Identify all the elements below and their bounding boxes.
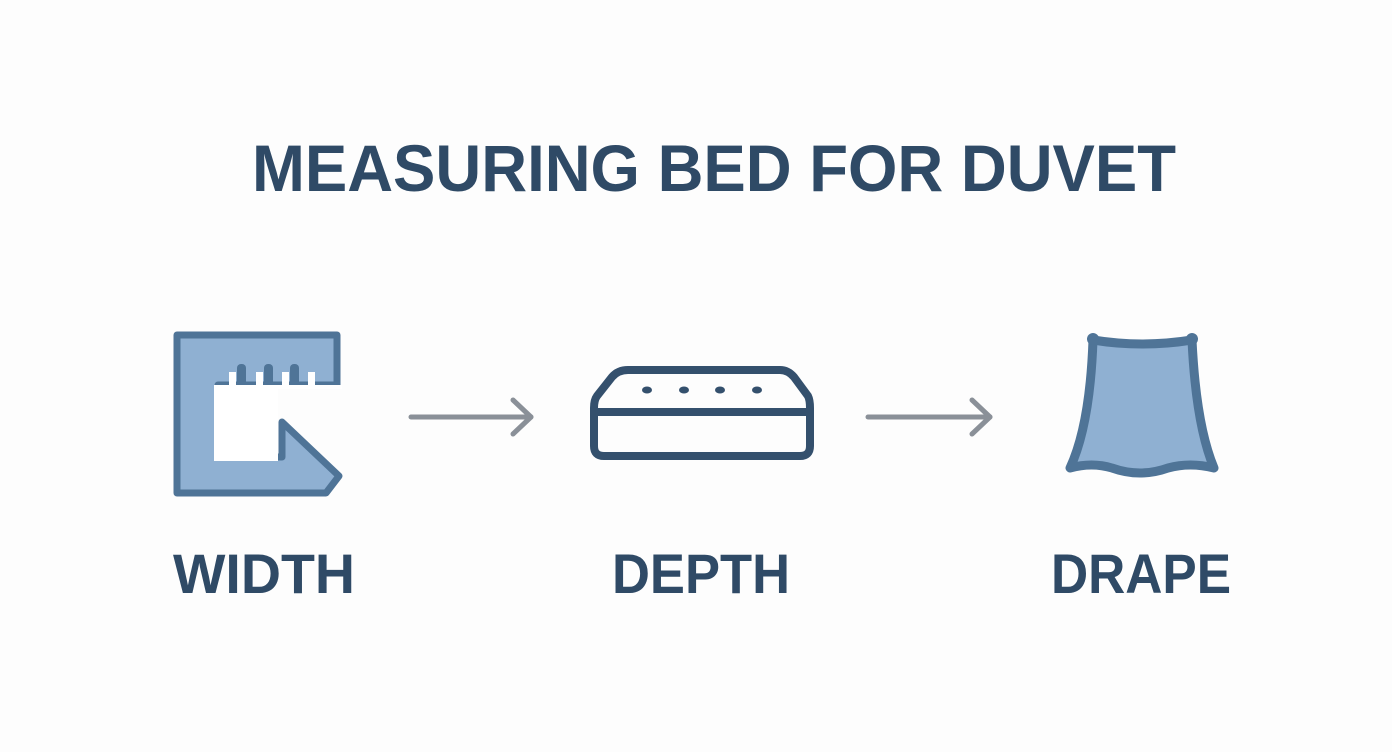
icon: mattress depth xyxy=(594,370,810,456)
icon: drape xyxy=(1070,333,1214,473)
arrow 2 xyxy=(868,400,990,434)
label: drape: DRAPE xyxy=(1051,542,1231,605)
title: MEASURING BED FOR DUVET xyxy=(252,131,1176,205)
arrow 1 xyxy=(411,400,531,434)
label: width: WIDTH xyxy=(173,542,355,605)
icon: width ruler xyxy=(177,335,342,493)
label: depth: DEPTH xyxy=(612,542,790,605)
